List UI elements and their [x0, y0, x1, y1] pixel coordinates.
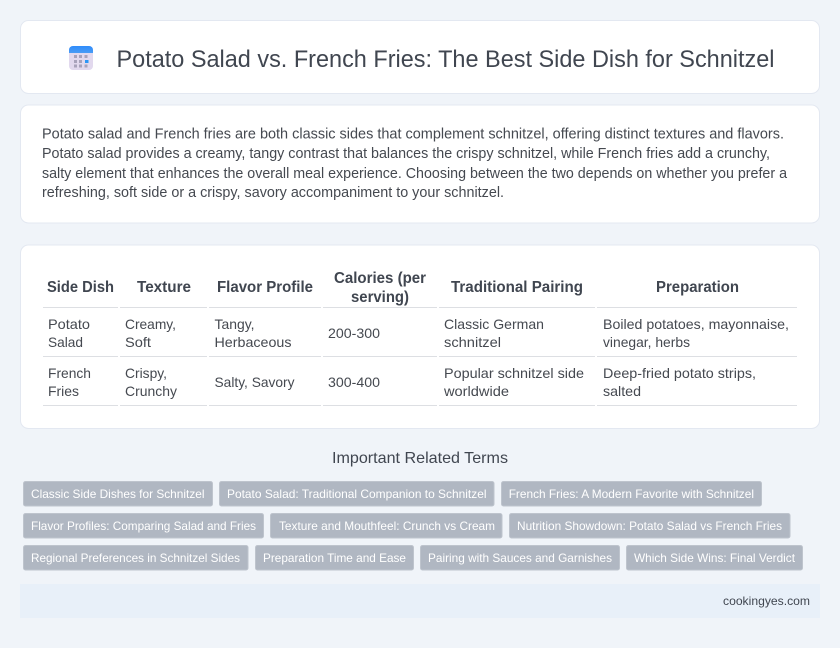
tag: Classic Side Dishes for Schnitzel: [31, 487, 204, 501]
intro text block: Potato salad and French fries are both classic sides that complement schnitzel, offering distinct textures and flavors.: [42, 126, 784, 142]
table row: potato salad: Potato: [48, 316, 90, 332]
table header row: serving): [351, 289, 409, 306]
footer source: cookingyes.com: [723, 594, 810, 608]
tag: [220, 482, 494, 506]
panel: introduction: [20, 105, 820, 223]
tag: [502, 482, 762, 506]
table row: potato salad: Classic German: [444, 316, 544, 332]
table row: french fries: 300-400: [328, 374, 380, 390]
table row: potato salad: Herbaceous: [214, 334, 292, 350]
table header row: Traditional Pairing: [451, 279, 583, 296]
table row: potato salad: Salad: [48, 334, 83, 350]
table row: potato salad: Creamy,: [125, 316, 176, 332]
table header row: [47, 270, 739, 306]
panel: comparison table: [20, 245, 820, 428]
tag: Nutrition Showdown: Potato Salad vs French Fries: [517, 519, 782, 533]
tag: [256, 546, 414, 570]
tag: Regional Preferences in Schnitzel Sides: [31, 551, 240, 565]
tag: [24, 546, 248, 570]
table row: french fries: [48, 365, 756, 399]
table row: potato salad: 200-300: [328, 325, 380, 341]
tag: [420, 546, 620, 570]
heading: related terms: Important Related Terms: [332, 450, 508, 467]
panel: related term tags: [24, 482, 802, 570]
panel: header: [20, 20, 820, 94]
tag: Which Side Wins: Final Verdict: [634, 551, 796, 565]
tag: [626, 546, 802, 570]
tag: French Fries: A Modern Favorite with Schnitzel: [509, 487, 754, 501]
table row: potato salad: vinegar, herbs: [603, 334, 690, 350]
tag: Texture and Mouthfeel: Crunch vs Cream: [279, 519, 495, 533]
table row: potato salad: schnitzel: [444, 334, 501, 350]
tag: Pairing with Sauces and Garnishes: [428, 551, 612, 565]
table header row: Side Dish: [47, 279, 114, 296]
table row: potato salad: Soft: [125, 334, 151, 350]
table header row: Texture: [137, 279, 191, 296]
tag: [510, 514, 790, 538]
tag: Preparation Time and Ease: [263, 551, 406, 565]
table row: french fries: French: [48, 365, 91, 381]
table row: potato salad: [48, 316, 789, 350]
intro text block: Potato salad provides a creamy, tangy contrast that balances the crispy schnitzel, while French fries add a crunchy,: [42, 146, 770, 162]
table row: french fries: Crispy,: [125, 365, 167, 381]
table row: potato salad: Boiled potatoes, mayonnaise,: [603, 316, 789, 332]
title: Potato Salad vs. French Fries: The Best Side Dish for Schnitzel: [116, 46, 774, 73]
table row: french fries: salted: [603, 383, 641, 399]
table row: french fries: Deep-fried potato strips,: [603, 365, 756, 381]
table row: french fries: Fries: [48, 383, 79, 399]
table row: french fries: Popular schnitzel side: [444, 365, 584, 381]
icon: calendar: [69, 46, 93, 70]
footer: [20, 584, 820, 618]
intro text block: [42, 126, 787, 201]
tag: [24, 514, 264, 538]
table row: potato salad: Tangy,: [214, 316, 254, 332]
table row: french fries: worldwide: [443, 383, 509, 399]
tag: Potato Salad: Traditional Companion to Schnitzel: [227, 487, 486, 501]
intro text block: refreshing, soft side or a crispy, savory accompaniment to your schnitzel.: [42, 185, 504, 201]
table header row: Preparation: [656, 279, 739, 296]
table row: french fries: Crunchy: [125, 383, 177, 399]
tag: [270, 514, 502, 538]
table header row: Calories (per: [334, 270, 426, 287]
intro text block: salty element that enhances the overall meal experience. Choosing between the two depends on whether you prefer a: [42, 166, 787, 182]
tag: [24, 482, 212, 506]
table row: french fries: Salty, Savory: [214, 374, 294, 390]
table header row: Flavor Profile: [217, 279, 313, 296]
tag: Flavor Profiles: Comparing Salad and Fries: [31, 519, 256, 533]
